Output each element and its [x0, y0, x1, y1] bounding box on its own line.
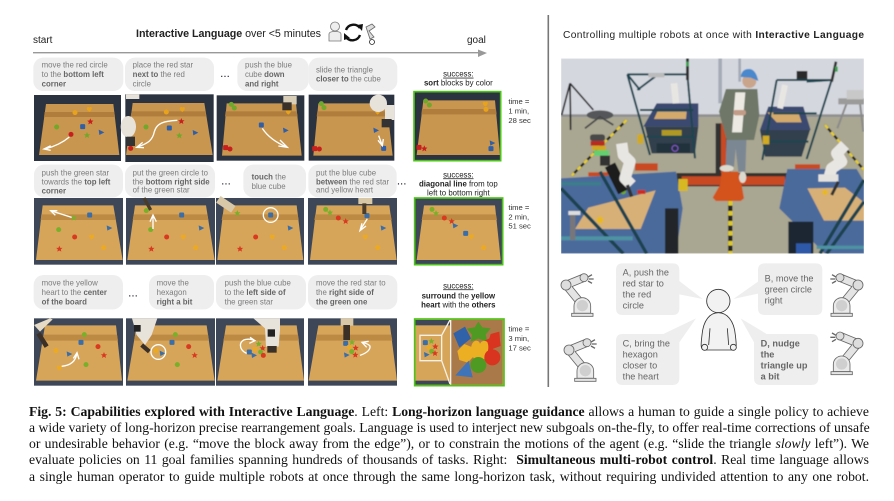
icon: exchange arrows: [344, 24, 363, 40]
success caption: surround the yellow: [422, 291, 495, 300]
photo: step 4: [308, 198, 397, 265]
time label: 3 min,: [508, 334, 529, 343]
time label: time =: [508, 203, 530, 212]
instruction bubble: center: [83, 288, 107, 297]
photo: step 3: [216, 318, 304, 386]
instruction bubble: the: [133, 177, 146, 186]
person: [726, 132, 747, 172]
ellipsis: ...: [221, 70, 230, 79]
photo: step 3: [217, 95, 304, 161]
speech bubble C: [616, 318, 696, 385]
success caption: sort blocks by color: [424, 79, 493, 88]
speech bubble D: the: [761, 349, 774, 359]
result photo with inset: [415, 319, 504, 386]
instruction bubble: hexagon: [157, 288, 187, 297]
instruction bubble: next to: [133, 70, 159, 79]
speech bubble B: green circle: [765, 285, 812, 295]
success caption: success:: [443, 70, 474, 79]
instruction bubble: touch the: [252, 172, 286, 181]
figure caption: Fig. 5: Capabilities explored with Interactive Language. Left: Long-horizon language guidance allows a human to guide a single policy to achieve: [29, 404, 869, 418]
photo: step 2: [126, 318, 215, 386]
instruction bubble: place the red star: [133, 61, 193, 70]
instruction bubble: the cube: [349, 75, 381, 84]
instruction bubble: blue cube: [252, 182, 286, 191]
instruction bubble: left side of: [246, 288, 286, 297]
instruction bubble: put the blue cube: [316, 168, 376, 177]
instruction bubble: move the red star to: [316, 279, 386, 288]
time label: time =: [508, 97, 530, 106]
photo: step 2: [126, 198, 215, 265]
figure caption: a wide variety of long-horizon precise rearrangement goals. Language is used to interject new subgoals on-the-fly, to offer real-time corrections of unsafe: [29, 420, 870, 435]
result photo: [415, 198, 503, 265]
figure caption: a single human operator to guide multiple robots at once through the same long-horizon task, without requiring undivided attention to any one robot.: [29, 469, 869, 484]
back left: [645, 127, 698, 153]
icon: robot: [366, 24, 375, 44]
instruction bubble: towards the: [42, 178, 84, 187]
speech bubble A: red star to: [623, 279, 664, 289]
instruction bubble: the green one: [316, 297, 368, 306]
row 3: surround the heart: [34, 275, 397, 386]
instruction bubble: the red star: [347, 177, 389, 186]
instruction bubble: of the green star: [133, 186, 190, 195]
instruction bubble: cube: [245, 70, 264, 79]
icon: robot D: [830, 332, 863, 375]
instruction bubble: [237, 58, 309, 91]
photo: step 4: [309, 95, 394, 161]
speech bubble A: circle: [623, 301, 644, 311]
ellipsis: ...: [397, 178, 407, 187]
instruction bubble: to the: [42, 70, 63, 79]
time label: 17 sec: [508, 343, 531, 352]
instruction bubble: the green star: [225, 297, 273, 306]
success caption: success:: [443, 281, 474, 290]
ellipsis: ...: [129, 290, 138, 299]
photo: step 4: [308, 318, 397, 386]
time label: 51 sec: [508, 222, 531, 231]
figure caption: evaluate policies on 11 goal families spanning hundreds of thousands of tasks. Right: Simultaneous multi-robot control. Real time language allows: [29, 452, 869, 467]
instruction bubble: right side of: [329, 288, 374, 297]
speech bubble B: right: [765, 296, 783, 306]
instruction bubble: [309, 58, 397, 91]
instruction bubble: [243, 165, 306, 197]
instruction bubble: corner: [42, 186, 66, 195]
instruction bubble: between: [316, 177, 348, 186]
instruction bubble: move the yellow: [42, 279, 98, 288]
success caption: success:: [443, 170, 474, 179]
back right: [760, 107, 811, 130]
photo: step 2: [121, 94, 214, 162]
time label: time =: [508, 325, 530, 334]
instruction bubble: corner: [42, 79, 66, 88]
success 3: surround the yellow heart: [415, 281, 531, 386]
instruction bubble: [149, 275, 214, 309]
icon: robot C: [564, 339, 597, 381]
label: goal: goal: [467, 35, 486, 46]
photo: step 1: [34, 198, 123, 265]
label: start: start: [33, 35, 53, 46]
icon: robot A: [561, 274, 594, 316]
timeline arrow: [33, 50, 487, 57]
instruction bubble: [216, 275, 306, 309]
row 2: diagonal line: [34, 165, 407, 265]
instruction bubble: the: [316, 288, 329, 297]
front right: [779, 169, 864, 254]
speech bubble B: [733, 263, 822, 315]
ellipsis: ...: [222, 178, 231, 187]
instruction bubble: bottom right side: [146, 177, 210, 186]
speech bubble D: D, nudge: [761, 338, 800, 348]
front left: [561, 172, 683, 254]
instruction bubble: [34, 165, 123, 197]
time label: 2 min,: [508, 212, 529, 221]
inset: enlarged shapes: [453, 322, 501, 377]
success caption: left to bottom right: [427, 188, 490, 197]
icon: robot B: [830, 274, 863, 316]
speech bubble A: [616, 263, 703, 315]
instruction bubble: the red: [158, 70, 185, 79]
timeline header: [33, 22, 487, 57]
speech bubble A: A, push the: [623, 268, 669, 278]
speech bubble D: triangle up: [761, 360, 808, 370]
instruction bubble: closer to: [316, 75, 349, 84]
instruction bubble: [308, 275, 397, 309]
success caption: heart with the others: [421, 301, 496, 310]
result photo: [414, 92, 501, 161]
instruction bubble: push the blue: [245, 61, 292, 70]
row 1: sort blocks: [33, 58, 397, 162]
speech bubble C: C, bring the: [623, 338, 670, 348]
instruction bubble: put the green circle to: [133, 168, 208, 177]
instruction bubble: push the green star: [42, 168, 109, 177]
instruction bubble: bottom left: [63, 70, 104, 79]
floor mat: [716, 123, 731, 175]
photo: multi-robot lab: [561, 58, 864, 254]
divider between panels: [548, 15, 549, 387]
photo: step 1: [34, 318, 123, 386]
diagram: one person commanding four robots: [561, 263, 863, 385]
success 2: diagonal line: [415, 170, 531, 265]
speech bubble A: the red: [623, 290, 651, 300]
speech bubble D: [741, 318, 818, 385]
instruction bubble: slide the triangle: [316, 65, 373, 74]
success 1: sort blocks by color: [414, 70, 531, 161]
time label: 28 sec: [508, 116, 531, 125]
speech bubble D: a bit: [761, 371, 779, 381]
speech bubble C: closer to: [623, 360, 657, 370]
instruction bubble: and yellow heart: [316, 186, 374, 195]
speech bubble B: B, move the: [765, 274, 814, 284]
figure caption: or undesirable behavior (e.g. “move the block away from the edge”), or to constrain the motions of the agent (e.g. “slide the triangle slowly left”). We: [29, 436, 869, 451]
instruction bubble: [125, 165, 215, 197]
instruction bubble: [125, 58, 214, 91]
instruction bubble: [308, 165, 397, 197]
photo: step 1: [34, 95, 121, 161]
instruction bubble: to the: [225, 288, 246, 297]
instruction bubble: circle: [133, 79, 151, 88]
right panel heading: Controlling multiple robots at once with Interactive Language: [563, 30, 864, 41]
heading: Interactive Language over 5 minutes: Interactive Language over <5 minutes: [136, 28, 321, 40]
instruction bubble: and right: [245, 79, 279, 88]
figure caption: [29, 404, 870, 484]
speech bubble C: hexagon: [623, 349, 658, 359]
instruction bubble: [34, 275, 123, 309]
instruction bubble: top left: [84, 178, 111, 187]
instruction bubble: down: [264, 70, 285, 79]
icon: person: [701, 289, 736, 350]
speech bubble C: the heart: [623, 371, 659, 381]
instruction bubble: move the: [157, 279, 189, 288]
instruction bubble: move the red circle: [42, 61, 108, 70]
instruction bubble: of the board: [42, 297, 87, 306]
photo: step 3: [216, 198, 304, 265]
instruction bubble: heart to the: [42, 288, 83, 297]
instruction bubble: [33, 58, 123, 91]
time label: 1 min,: [508, 106, 529, 115]
instruction bubble: right a bit: [157, 297, 193, 306]
icon: human: [329, 22, 341, 41]
instruction bubble: push the blue cube: [225, 279, 291, 288]
success caption: diagonal line from top: [419, 180, 498, 189]
